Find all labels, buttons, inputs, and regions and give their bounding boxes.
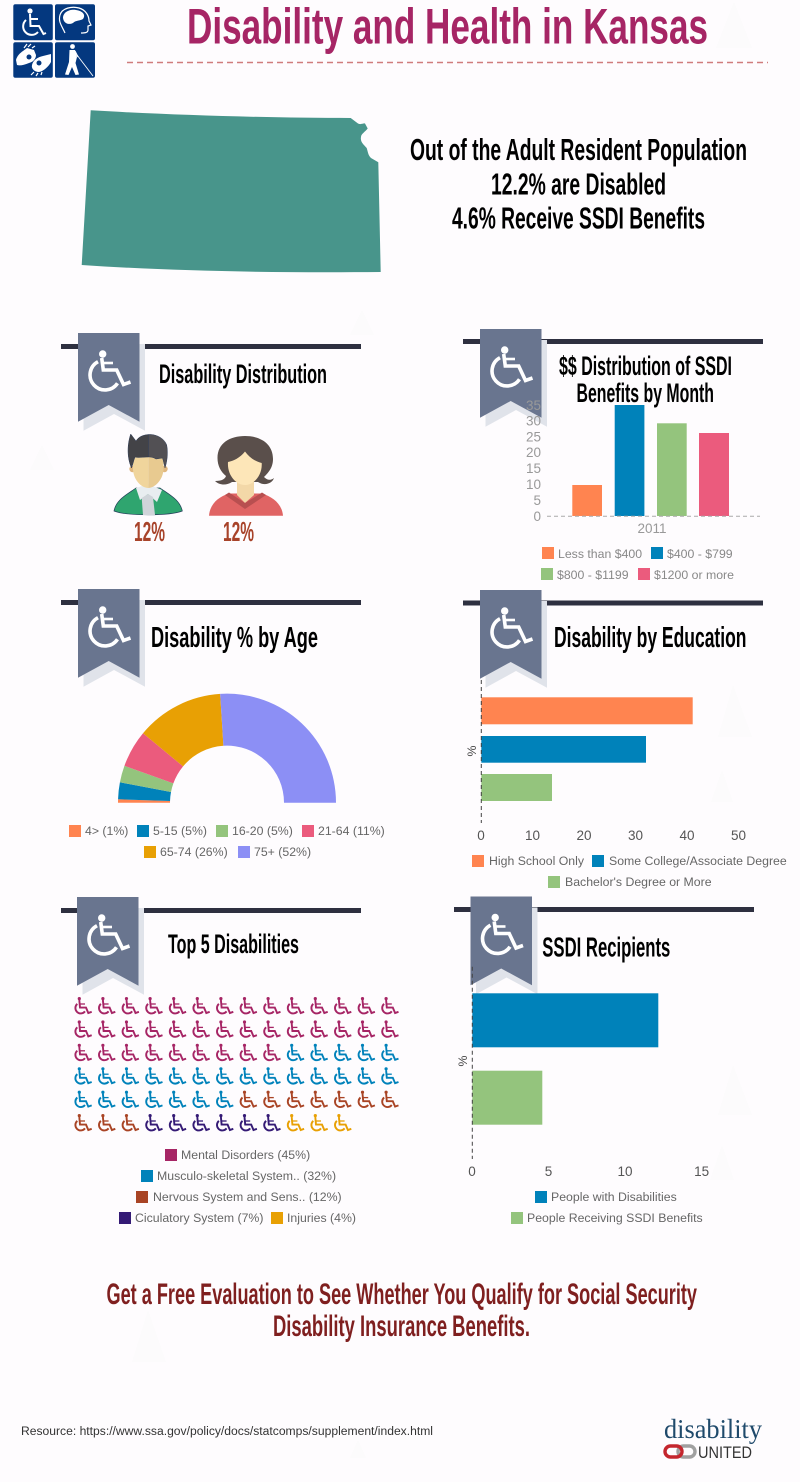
bar chart: education: 50 xyxy=(731,828,746,843)
legend: top 5 disabilities: Nervous System and Sens.. (12%) xyxy=(153,1190,342,1204)
intro statistics text xyxy=(410,132,747,236)
call to action: Disability Insurance Benefits. xyxy=(273,1310,530,1343)
icon: ribbon wheelchair xyxy=(470,896,538,994)
legend: age: 65-74 (26%) xyxy=(160,845,228,859)
legend: age: 5-15 (5%) xyxy=(153,824,207,838)
donut chart: age xyxy=(118,694,336,803)
bar chart: benefits by month: 2011 xyxy=(637,521,667,536)
legend: benefits: $800 - $1199 xyxy=(557,568,629,582)
heading: disability by age: Disability % by Age xyxy=(151,622,318,654)
resource citation: Resource: https://www.ssa.gov/policy/docs/statcomps/supplement/index.html xyxy=(21,1426,433,1438)
legend: top 5 disabilities: Injuries (4%) xyxy=(287,1211,356,1225)
panel: disability by age xyxy=(61,589,385,859)
bar chart: benefits by month: 0 xyxy=(533,509,541,524)
panel: disability by education xyxy=(463,590,787,889)
bar chart: benefits by month: 15 xyxy=(526,461,541,476)
bar chart: education xyxy=(465,680,746,843)
logo: disability united: UNITED xyxy=(698,1443,752,1462)
bar chart: SSDI recipients: 0 xyxy=(468,1164,476,1179)
panel: SSDI recipients xyxy=(454,896,754,1225)
legend: age: 4> (1%) xyxy=(85,824,128,838)
heading: SSDI distribution xyxy=(559,351,732,408)
legend: age: 21-64 (11%) xyxy=(318,824,385,838)
heading: top 5 disabilities: Top 5 Disabilities xyxy=(168,929,299,959)
legend: education: Bachelor's Degree or More xyxy=(565,875,712,889)
icon: man xyxy=(114,434,182,515)
bar chart: education: 10 xyxy=(525,828,540,843)
legend: top 5 disabilities xyxy=(119,1148,356,1225)
panel: SSDI benefit distribution xyxy=(463,329,763,582)
bar chart: benefits by month xyxy=(526,398,760,536)
legend: SSDI recipients: People with Disabilities xyxy=(551,1190,677,1204)
icon: ribbon wheelchair xyxy=(78,333,145,431)
bar chart: education: 30 xyxy=(628,828,643,843)
legend: SSDI recipients xyxy=(511,1190,703,1225)
legend: benefits: $1200 or more xyxy=(654,568,734,582)
icon: ribbon wheelchair xyxy=(480,329,547,427)
legend: education: High School Only xyxy=(489,854,585,868)
icon: ribbon wheelchair xyxy=(480,590,547,688)
legend: top 5 disabilities: Mental Disorders (45%) xyxy=(181,1148,310,1162)
bar chart: SSDI recipients: % xyxy=(456,1055,470,1066)
bar chart: benefits by month: 25 xyxy=(526,430,541,444)
legend: education: Some College/Associate Degree xyxy=(609,854,787,868)
legend: age xyxy=(69,824,385,859)
intro statistics text: 12.2% are Disabled xyxy=(491,166,666,202)
panel: top 5 disabilities xyxy=(61,897,398,1225)
bar chart: benefits by month: 10 xyxy=(526,477,541,492)
bar chart: SSDI recipients: 5 xyxy=(545,1164,552,1179)
panel: disability distribution xyxy=(61,333,361,547)
logo: disability united xyxy=(664,1414,762,1462)
legend: SSDI recipients: People Receiving SSDI Benefits xyxy=(527,1211,703,1225)
logo: disability united: disability xyxy=(664,1414,762,1444)
bar chart: SSDI recipients: 10 xyxy=(617,1164,633,1179)
bar chart: education: % xyxy=(465,745,479,756)
call to action xyxy=(106,1278,697,1343)
icon: woman xyxy=(209,436,283,516)
legend: benefits xyxy=(541,547,734,582)
icon: ribbon wheelchair xyxy=(77,897,144,995)
pictogram: wheelchair icons xyxy=(75,997,398,1130)
bar chart: benefits by month: 30 xyxy=(526,414,541,428)
statistic: men 12%: 12% xyxy=(134,516,165,547)
logo: accessibility icons xyxy=(13,4,95,78)
legend: benefits: Less than $400 xyxy=(558,547,642,561)
bar chart: SSDI recipients: 15 xyxy=(694,1164,709,1179)
bar chart: benefits by month: 5 xyxy=(533,493,541,508)
map: Kansas xyxy=(82,110,381,272)
legend: age: 75+ (52%) xyxy=(254,845,311,859)
bar chart: education: 40 xyxy=(679,828,695,843)
legend: top 5 disabilities: Musculo-skeletal System.. (32%) xyxy=(157,1169,336,1183)
bar chart: education: 0 xyxy=(477,828,485,843)
heading: disability distribution: Disability Distribution xyxy=(159,359,327,389)
legend: education xyxy=(472,854,787,889)
statistic: women 12%: 12% xyxy=(223,516,254,547)
bar chart: benefits by month: 20 xyxy=(526,445,541,460)
icon: ribbon wheelchair xyxy=(78,589,145,687)
legend: benefits: $400 - $799 xyxy=(667,547,733,561)
bar chart: SSDI recipients xyxy=(456,967,709,1179)
bar chart: benefits by month: 35 xyxy=(526,398,541,413)
legend: top 5 disabilities: Ciculatory System (7%) xyxy=(135,1211,263,1225)
heading: SSDI recipients: SSDI Recipients xyxy=(542,932,670,963)
bar chart: education: 20 xyxy=(576,828,592,843)
legend: age: 16-20 (5%) xyxy=(232,824,293,838)
